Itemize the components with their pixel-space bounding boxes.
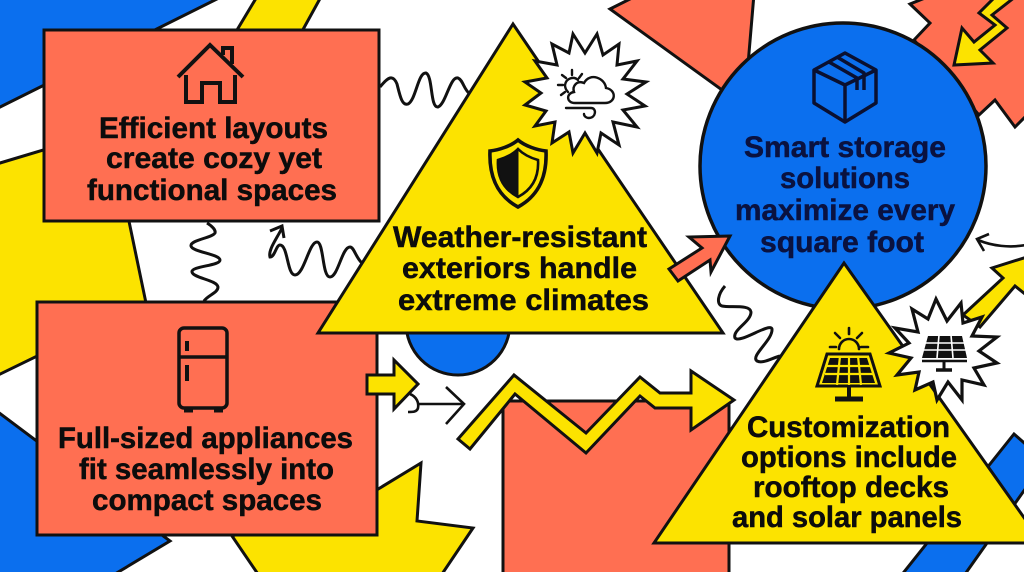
text: customization: [732, 411, 962, 534]
shape: blue top left: [0, 0, 235, 112]
arrow: yellow upper right: [963, 256, 1024, 327]
shape: blue semicircle: [406, 271, 510, 375]
text: layouts: create cozy yet: [106, 142, 322, 175]
panel: layouts: [44, 30, 379, 221]
arrow: yellow zigzag: [458, 371, 734, 453]
icon: box: [814, 53, 876, 122]
burst: weather: [525, 34, 646, 153]
text: storage: solutions: [780, 162, 910, 195]
icon: weather: [558, 70, 614, 118]
text: storage: maximize every: [735, 194, 955, 227]
icon: solar panel: [817, 328, 880, 399]
shape: yellow left: [0, 130, 146, 379]
text: weather: exteriors handle: [402, 252, 637, 285]
text: appliances: [58, 422, 353, 517]
arrow: wavy up: [270, 226, 362, 277]
text: customization: and solar panels: [732, 501, 962, 534]
shape: coral block: [503, 401, 729, 572]
text: storage: square foot: [760, 226, 924, 259]
text: weather: Weather-resistant: [393, 221, 647, 254]
icon: house: [178, 45, 243, 102]
shape: blue band bottom right: [900, 434, 1024, 572]
squiggle: top: [380, 73, 470, 107]
text: weather: extreme climates: [398, 284, 649, 317]
shape: coral triangle top: [610, 0, 754, 100]
icon: fridge: [179, 328, 227, 410]
panel: storage circle: [700, 23, 986, 309]
shape: yellow star bottom: [232, 463, 473, 572]
text: weather: [393, 221, 649, 317]
text: storage: [735, 131, 955, 259]
icon: shield: [490, 140, 546, 207]
text: appliances: compact spaces: [92, 484, 322, 517]
shape: coral star top right: [910, 0, 1024, 127]
arrow: thin right: [408, 387, 464, 424]
arrow: yellow lightning top right: [954, 0, 1015, 65]
panel: weather triangle: [318, 24, 723, 333]
text: layouts: [87, 112, 337, 207]
text: layouts: Efficient layouts: [99, 112, 328, 145]
text: layouts: functional spaces: [87, 174, 337, 207]
text: customization: Customization: [747, 411, 950, 444]
panel: appliances: [37, 302, 377, 535]
icon: small solar panel: [922, 335, 967, 370]
text: appliances: fit seamlessly into: [79, 453, 334, 486]
arrow: thin curved left: [977, 234, 1024, 251]
arrow: coral: [669, 236, 730, 281]
squiggle: lower centre: [718, 286, 780, 362]
panel: customization triangle: [654, 263, 1024, 543]
squiggle: vertical: [191, 223, 220, 301]
burst: solar: [889, 299, 997, 400]
arrow: small yellow: [367, 360, 418, 409]
text: customization: rooftop decks: [753, 471, 949, 504]
shape: blue bottom left: [0, 406, 170, 572]
text: storage: Smart storage: [744, 131, 946, 164]
shape: yellow band top: [234, 0, 322, 35]
text: appliances: Full-sized appliances: [58, 422, 353, 455]
text: customization: options include: [741, 441, 957, 474]
